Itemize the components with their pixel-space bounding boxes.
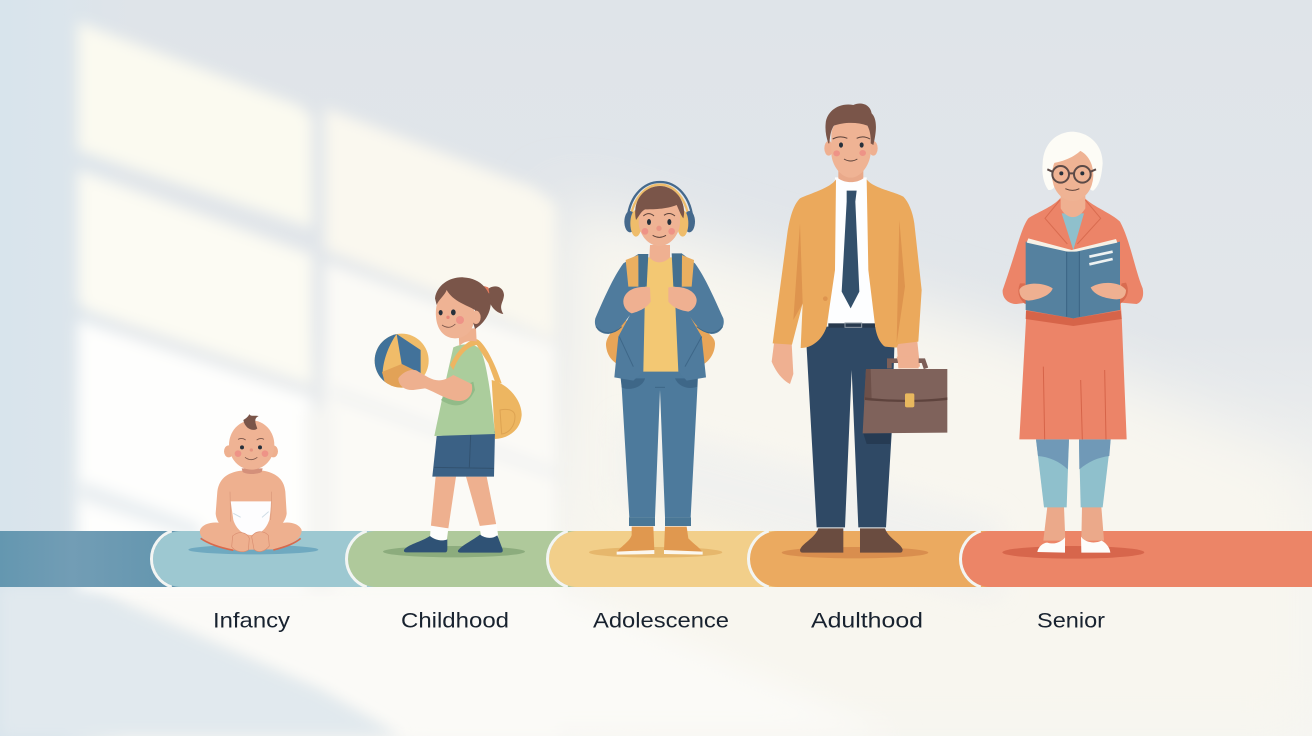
neck — [1061, 195, 1085, 217]
ear cups — [624, 211, 636, 232]
head — [436, 288, 474, 338]
label: childhood: Childhood — [401, 610, 509, 632]
shirt — [828, 177, 875, 324]
ball — [373, 333, 430, 390]
hands — [1019, 284, 1053, 301]
band: start segment — [0, 531, 181, 587]
jacket button — [823, 296, 828, 301]
cuffs — [629, 517, 655, 526]
band: white separators — [151, 531, 981, 587]
undershirt — [1062, 213, 1084, 250]
backpack — [492, 380, 522, 439]
shoes — [617, 527, 654, 553]
band: childhood segment — [348, 531, 577, 587]
hand fingers over handle — [897, 357, 919, 368]
ears — [824, 141, 833, 156]
hands — [232, 533, 249, 552]
arm and hand — [398, 370, 472, 401]
book — [1026, 242, 1120, 318]
pants — [621, 370, 698, 517]
trousers — [807, 327, 895, 527]
socks — [430, 526, 448, 542]
backpack straps — [626, 255, 638, 287]
collar lines — [1045, 200, 1101, 244]
label: adulthood: Adulthood — [811, 610, 923, 632]
trousers — [1036, 439, 1069, 507]
band: adulthood segment — [750, 531, 990, 587]
face — [240, 445, 244, 449]
briefcase — [863, 369, 947, 433]
hair — [435, 277, 491, 329]
ear — [471, 311, 481, 324]
legs — [431, 477, 456, 528]
clasp — [905, 393, 914, 407]
waist band — [1026, 311, 1122, 326]
label: senior: Senior — [1037, 610, 1105, 632]
adult head — [824, 103, 878, 182]
ground shadow — [782, 547, 928, 558]
jacket right — [867, 179, 922, 348]
head — [229, 420, 274, 470]
band: adolescence segment — [549, 531, 778, 587]
shoes — [800, 528, 843, 553]
glasses — [1047, 166, 1096, 183]
jacket — [595, 254, 646, 381]
shoes — [1037, 537, 1065, 553]
jacket left — [773, 179, 836, 348]
tee — [642, 257, 679, 372]
hands — [623, 287, 651, 313]
label: infancy: Infancy — [213, 610, 291, 632]
hair tuft — [243, 414, 259, 430]
belt — [828, 323, 875, 328]
timeline band — [0, 531, 1312, 587]
hair back — [1042, 132, 1103, 191]
face — [439, 310, 443, 315]
coat seams — [1043, 367, 1106, 439]
shoes — [404, 536, 447, 552]
neck — [838, 163, 863, 182]
case shadow on leg — [863, 433, 891, 444]
face — [647, 219, 651, 225]
ground shadow — [188, 545, 318, 554]
shirt — [434, 344, 495, 436]
hair — [635, 186, 684, 220]
diaper — [231, 501, 272, 535]
face — [831, 120, 871, 178]
coat — [1003, 198, 1143, 439]
figure: adolescent with headphones — [589, 182, 724, 558]
features — [839, 142, 843, 148]
sleeve cuffs — [1018, 283, 1128, 304]
stage labels — [213, 610, 1105, 632]
figure: senior with book — [1002, 132, 1144, 559]
ponytail — [485, 286, 504, 314]
right hand — [897, 342, 920, 368]
hair — [825, 103, 876, 145]
briefcase handle — [889, 361, 926, 368]
neck — [242, 468, 263, 474]
backpack — [606, 317, 640, 364]
ground shadow — [589, 547, 722, 558]
ground shadow — [1002, 546, 1144, 559]
shoulder strap — [450, 339, 502, 383]
headphone band — [627, 182, 693, 223]
figure: child with ball — [373, 277, 525, 557]
window light panes — [78, 22, 556, 590]
shorts — [432, 431, 495, 477]
tie — [842, 191, 859, 308]
neck — [649, 245, 670, 262]
band: infancy segment — [153, 531, 376, 587]
legs — [200, 523, 302, 550]
lower legs — [1043, 507, 1065, 541]
head — [639, 197, 680, 246]
figure: baby — [188, 414, 318, 554]
band: senior segment — [962, 531, 1312, 587]
face — [1052, 149, 1093, 201]
ground shadow — [383, 546, 525, 557]
left hand — [772, 343, 793, 384]
figure: adult with briefcase — [772, 177, 947, 558]
neck — [458, 328, 477, 346]
label: adolescence: Adolescence — [593, 610, 729, 632]
hair front — [1047, 138, 1096, 170]
ears — [224, 445, 233, 457]
torso — [216, 471, 287, 537]
